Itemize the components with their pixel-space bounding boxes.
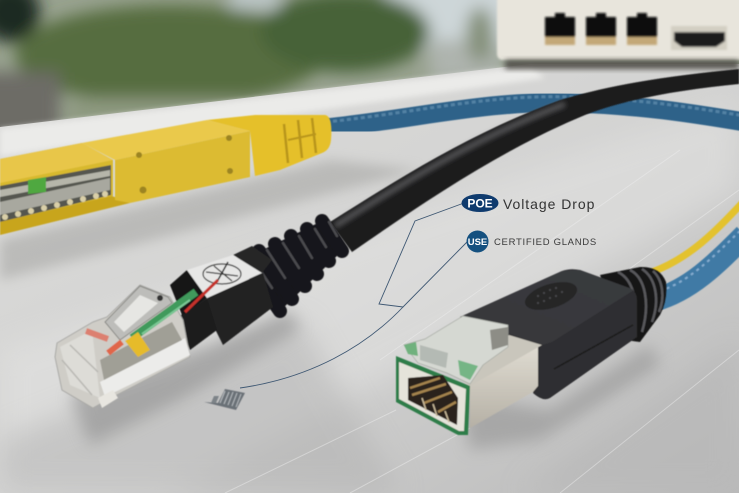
clear plug housing [55, 285, 190, 408]
callout: use certified glands [466, 230, 597, 252]
silver shield [470, 345, 538, 428]
black cable [330, 69, 739, 252]
shadow of the yellow connector [0, 160, 420, 280]
USE badge: USE [468, 237, 487, 248]
POE badge: POE [467, 196, 493, 210]
right plug shadow [460, 345, 660, 450]
coloured wires [86, 262, 228, 353]
black plug body [460, 269, 637, 399]
router with ports [497, 0, 739, 69]
green circuit board front [396, 356, 470, 435]
right RJ45 plug [396, 267, 666, 435]
annotation leader lines [240, 203, 467, 388]
small chip component [204, 389, 245, 410]
front right cables [652, 200, 739, 300]
left plug shadow [70, 310, 300, 445]
label text: CERTIFIED GLANDS [494, 237, 597, 248]
blue cable, rear [326, 97, 739, 128]
yellow connector, rear [0, 115, 331, 235]
ribbed boot [600, 267, 666, 342]
white label with symbol [187, 255, 262, 298]
callout: POE voltage drop [462, 194, 595, 212]
blurred outdoor background [0, 0, 739, 142]
contact cavity [408, 375, 458, 425]
left RJ45 plug with black ribbed boot [55, 221, 342, 408]
black collar [207, 273, 273, 345]
ribbed strain relief boot [244, 221, 342, 311]
label text: Voltage Drop [503, 196, 595, 212]
clear latch [404, 316, 508, 384]
